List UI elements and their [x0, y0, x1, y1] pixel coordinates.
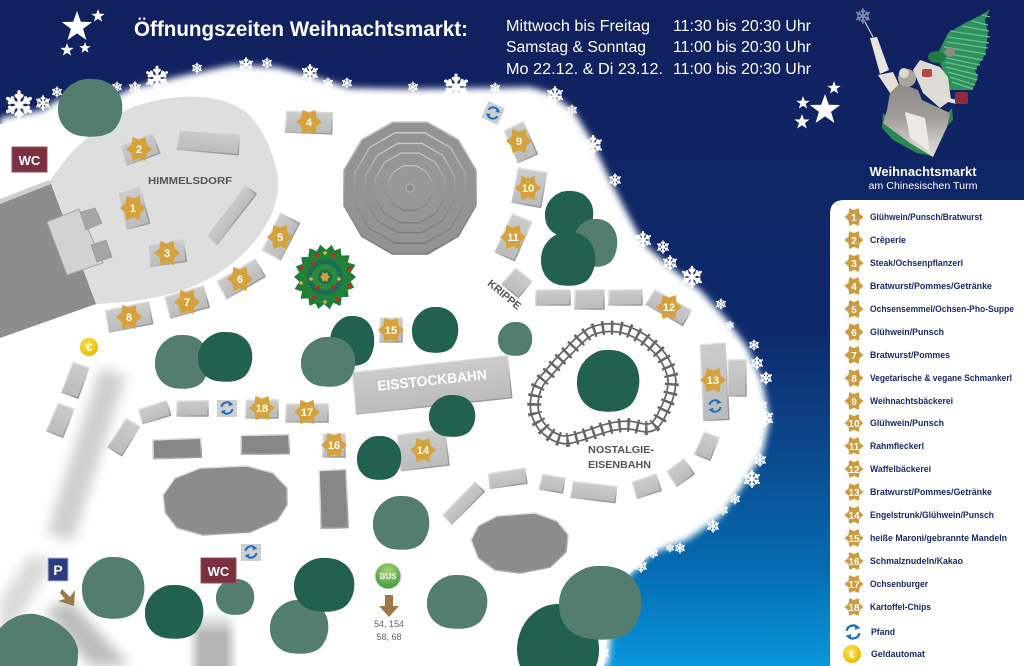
- legend entry 1: Glühwein/Punsch/Bratwurst: [870, 212, 982, 222]
- legend entry 13: Bratwurst/Pommes/Getränke: [870, 487, 992, 497]
- map stars 1 to 18: 2: [136, 144, 142, 156]
- opening hours: Mo 22.12. & Di 23.12.: [506, 61, 663, 78]
- bus stop: 54, 154: [374, 619, 404, 629]
- map stars 1 to 18: 1: [130, 203, 136, 215]
- roads: [0, 368, 240, 666]
- logo caption: am Chinesischen Turm: [868, 181, 978, 192]
- Pfand icons on map: [217, 101, 722, 561]
- Eisstockbahn: [352, 356, 512, 414]
- legend entry 8: 8: [851, 374, 857, 385]
- WC sign north-west: [12, 147, 47, 172]
- opening hours: 11:30 bis 20:30 Uhr: [673, 18, 811, 35]
- legend entry 6: Glühwein/Punsch: [870, 327, 944, 337]
- oval pavilion east: [471, 513, 568, 573]
- Christmas tree: [283, 235, 367, 319]
- map stars 1 to 18: 12: [663, 302, 675, 314]
- legend entry 5: Ochsensemmel/Ochsen-Pho-Suppe: [870, 304, 1014, 314]
- legend entry 16: 16: [848, 557, 860, 568]
- map stars 1 to 18: 8: [126, 312, 132, 324]
- legend entry Geldautomat: [843, 645, 925, 663]
- legend entry 3: Steak/Ochsenpflanzerl: [870, 258, 963, 268]
- legend entry 17: [844, 575, 928, 593]
- label: Nostalgie-Eisenbahn: [588, 444, 655, 471]
- opening hours: 11:00 bis 20:30 Uhr: [673, 61, 811, 78]
- Himmelsdorf area: [50, 97, 278, 304]
- logo caption: Weihnachtsmarkt: [870, 164, 977, 179]
- opening hours: [506, 18, 811, 78]
- stalls: south-east arc: [442, 432, 719, 524]
- legend entry 11: Rahmfleckerl: [870, 441, 924, 451]
- legend entry 12: Waffelbäckerei: [870, 464, 931, 474]
- oval pavilion west: [163, 466, 287, 535]
- legend entry 10: 10: [848, 419, 860, 430]
- map stars 1 to 18: 13: [707, 375, 719, 387]
- legend entry 16: Schmalznudeln/Kakao: [870, 556, 963, 566]
- legend entry 8: [844, 369, 1012, 387]
- legend entry 2: Crêperie: [870, 235, 906, 245]
- legend entry 7: 7: [851, 351, 857, 362]
- carousel roof: [344, 122, 476, 254]
- legend entry 8: Vegetarische & vegane Schmankerl: [870, 373, 1012, 383]
- opening hours: Samstag & Sonntag: [506, 39, 646, 56]
- map stars 1 to 18: 15: [385, 325, 397, 337]
- legend entry 10: Glühwein/Punsch: [870, 418, 944, 428]
- map stars 1 to 18: 17: [301, 407, 313, 419]
- label: Nostalgie-Eisenbahn: EISENBAHN: [588, 459, 651, 471]
- logo caption: [868, 164, 978, 192]
- legend entry 16: [844, 552, 963, 570]
- legend entry 4: Bratwurst/Pommes/Getränke: [870, 281, 992, 291]
- map stars 1 to 18: 16: [328, 440, 340, 452]
- stars top left: [60, 9, 105, 56]
- legend entry 11: 11: [849, 442, 860, 453]
- arrow to parking: [58, 589, 75, 606]
- legend entry 2: 2: [851, 236, 857, 247]
- panel: legend: [830, 200, 1024, 666]
- heading: Öffnungszeiten Weihnachtsmarkt:: [134, 18, 468, 41]
- legend entry 12: [844, 460, 931, 478]
- label: Himmelsdorf: HIMMELSDORF: [148, 175, 233, 187]
- legend entry 1: 1: [851, 213, 857, 224]
- legend entry 15: 15: [848, 534, 860, 545]
- legend entry 1: [844, 208, 982, 226]
- snowflakes along the edge: [8, 58, 772, 659]
- legend entry 15: heiße Maroni/gebrannte Mandeln: [870, 533, 1007, 543]
- opening hours: 11:00 bis 20:30 Uhr: [673, 39, 811, 56]
- legend entry 4: [844, 277, 992, 295]
- map stars 1 to 18: 4: [306, 117, 313, 129]
- legend entry 15: [844, 529, 1007, 547]
- legend entry 13: [844, 483, 992, 501]
- legend entry 18: Kartoffel-Chips: [870, 602, 931, 612]
- bus stop: 58, 68: [376, 632, 402, 642]
- legend entry 5: 5: [851, 305, 857, 316]
- main hall building: [0, 180, 96, 338]
- legend entry 13: 13: [848, 488, 860, 499]
- legend entry 9: 9: [851, 397, 857, 408]
- bus stop: [374, 563, 404, 642]
- stalls: Himmelsdorf: [105, 111, 332, 332]
- legend entry Pfand: [846, 625, 895, 639]
- legend entry 9: [844, 392, 953, 410]
- stars beside logo: [794, 81, 841, 128]
- map stars 1 to 18: 10: [522, 183, 534, 195]
- Eisstockbahn: EISSTOCKBAHN: [376, 366, 488, 394]
- legend entry 3: 3: [851, 259, 857, 270]
- legend entry Geldautomat: Geldautomat: [871, 649, 925, 659]
- legend entry 5: [844, 300, 1014, 318]
- trees: [0, 79, 641, 666]
- map stars 1 to 18: 3: [164, 248, 170, 260]
- legend entry 18: 18: [848, 603, 860, 614]
- legend entry 6: 6: [851, 328, 857, 339]
- legend entry 3: [844, 254, 963, 272]
- logo illustration: [857, 9, 990, 157]
- map stars 1 to 18: 14: [417, 445, 430, 457]
- legend entry 14: [844, 506, 994, 524]
- WC sign north-west: WC: [19, 153, 41, 168]
- WC sign south: WC: [208, 564, 230, 579]
- label: Krippe: KRIPPE: [485, 278, 523, 312]
- map stars 1 to 18: 7: [184, 297, 190, 309]
- parking sign: P: [53, 562, 63, 578]
- legend entry 11: [844, 437, 924, 455]
- cash machine coin on map: [80, 338, 98, 356]
- legend entry 14: Engelstrunk/Glühwein/Punsch: [870, 510, 994, 520]
- legend entry 6: [844, 323, 944, 341]
- stalls: north-east row: [495, 122, 746, 421]
- legend entry 17: 17: [848, 580, 860, 591]
- legend entry 14: 14: [848, 511, 860, 522]
- legend entry 17: Ochsenburger: [870, 579, 928, 589]
- legend entry 4: 4: [851, 282, 857, 293]
- map stars 1 to 18: 9: [516, 136, 522, 148]
- map stars 1 to 18: 11: [507, 232, 519, 244]
- WC sign south: [201, 558, 236, 583]
- legend entry 18: [844, 598, 931, 616]
- legend entry 7: [844, 346, 950, 364]
- legend entry 10: [844, 414, 944, 432]
- bus stop: BUS: [380, 572, 397, 581]
- map stars 1 to 18: 18: [256, 403, 268, 415]
- legend entry 7: Bratwurst/Pommes: [870, 350, 950, 360]
- stalls: west and centre: [47, 318, 449, 528]
- map stars 1 to 18: [116, 110, 726, 462]
- opening hours: Mittwoch bis Freitag: [506, 18, 650, 35]
- parking sign: [48, 558, 68, 581]
- stage with stairs: [47, 208, 112, 275]
- legend entry Geldautomat: €: [849, 649, 855, 661]
- map stars 1 to 18: 6: [237, 274, 243, 286]
- snow field: [0, 65, 770, 666]
- legend entry 9: Weihnachtsbäckerei: [870, 396, 953, 406]
- label: Nostalgie-Eisenbahn: NOSTALGIE-: [588, 444, 655, 456]
- legend entry 2: [844, 231, 906, 249]
- map stars 1 to 18: 5: [277, 232, 283, 244]
- railway loop: [534, 328, 672, 440]
- cash machine coin on map: €: [86, 342, 92, 354]
- legend entry 12: 12: [848, 465, 860, 476]
- legend entry Pfand: Pfand: [871, 627, 895, 637]
